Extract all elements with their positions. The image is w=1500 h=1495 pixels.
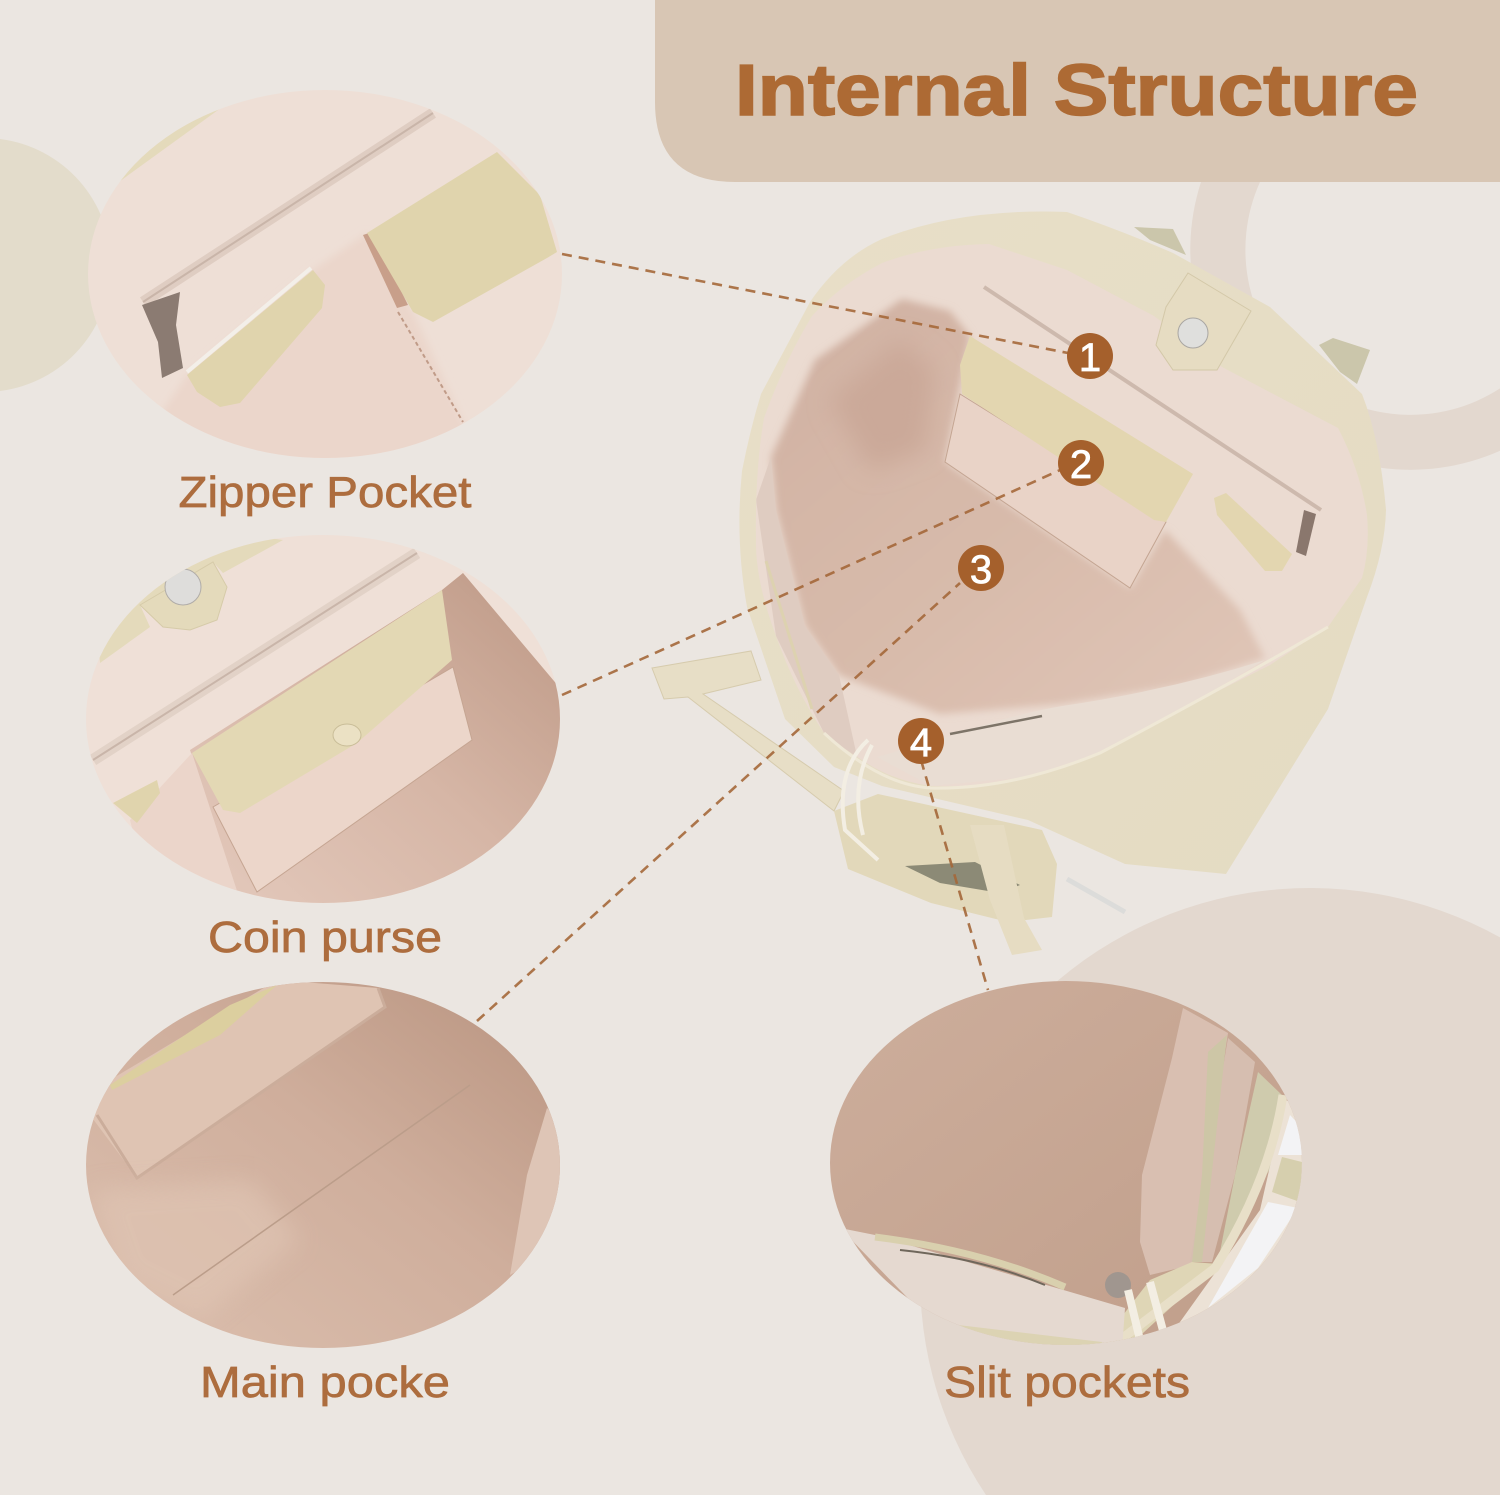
panel: coin purse (85, 530, 570, 962)
side slit pocket (756, 466, 856, 754)
slit pockets label: Slit pockets (944, 1358, 1190, 1407)
number badge 1: 1 (1079, 336, 1101, 380)
coin purse label: Coin purse (208, 913, 442, 962)
number badge 3 (958, 545, 1004, 592)
coin pouch (834, 740, 1125, 955)
bag body (739, 212, 1386, 874)
bag straps behind (1134, 227, 1370, 384)
inner pocket panel (945, 394, 1166, 588)
main bag illustration (652, 212, 1386, 955)
main pocket label: Main pocke (200, 1358, 450, 1407)
number badge 2: 2 (1070, 443, 1092, 487)
title panel (655, 0, 1500, 182)
number badge 1 (1067, 333, 1113, 380)
zipper pocket photo (88, 90, 562, 470)
title: Internal Structure (735, 51, 1418, 131)
pocket flap (960, 336, 1193, 522)
zipper pull (1296, 510, 1316, 556)
slit pockets photo (828, 980, 1320, 1350)
slit pocket edge (766, 561, 812, 709)
bag floor (771, 299, 1265, 714)
front lining strap (1052, 661, 1262, 708)
number badge 3: 3 (970, 548, 992, 592)
left handle strap (652, 651, 844, 811)
number badge 2 (1058, 440, 1104, 487)
panel: zipper pocket (88, 90, 562, 517)
main pocket photo (85, 980, 570, 1350)
bag gap shadow (950, 716, 1042, 734)
snap tab (1156, 273, 1251, 370)
panel: slit pockets (828, 980, 1320, 1407)
number badge 4: 4 (910, 721, 932, 765)
front rim highlight (824, 627, 1328, 788)
number badge 4 (898, 718, 944, 765)
small flap (1214, 493, 1292, 571)
bag interior lining (750, 240, 1380, 790)
panel: main pocket (85, 980, 570, 1407)
zipper pocket label: Zipper Pocket (178, 468, 472, 517)
coin purse photo (85, 530, 570, 910)
dashed connector lines (477, 254, 1068, 1021)
zipper line (984, 287, 1321, 510)
